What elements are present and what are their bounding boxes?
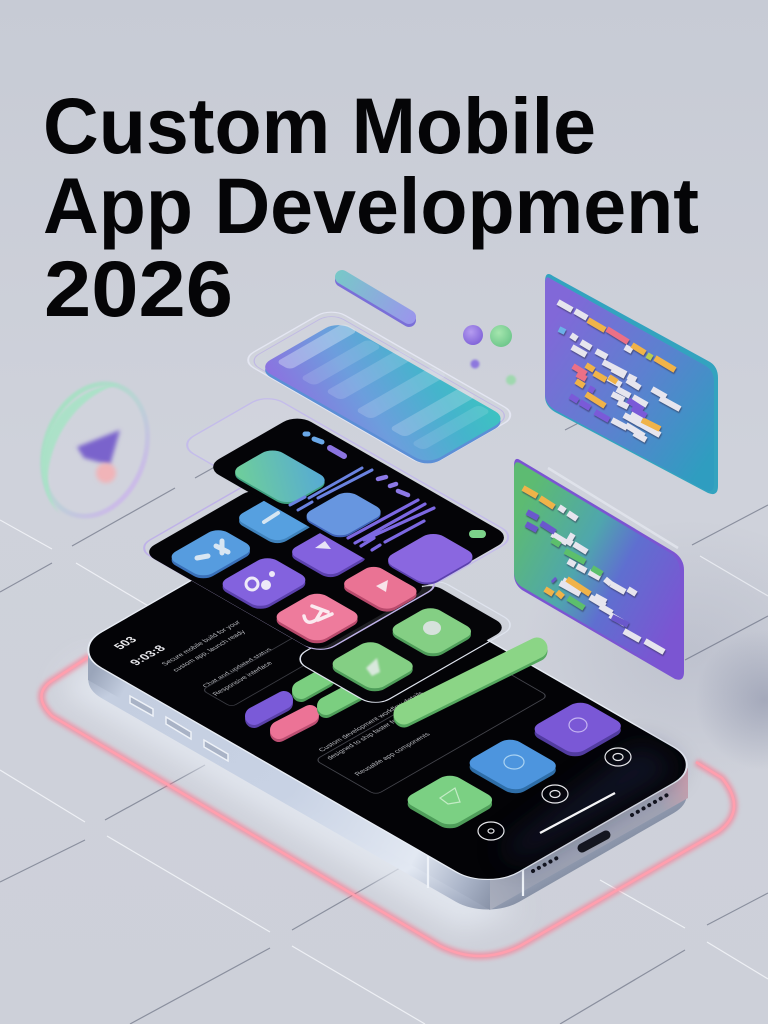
tray glass frame <box>292 577 518 707</box>
blue tile <box>166 527 256 582</box>
code tokens 1 <box>558 302 680 440</box>
dashboard lines purple <box>348 500 434 550</box>
glass inner edge <box>247 312 511 464</box>
gradient panel <box>258 321 508 464</box>
dashboard dots <box>305 434 322 442</box>
title line 3: 2026 <box>44 244 233 333</box>
pink tile rear <box>339 564 422 614</box>
card outline top <box>202 625 345 707</box>
glass frame <box>240 308 518 468</box>
green long bar <box>404 648 537 717</box>
panel rows <box>276 323 491 450</box>
purple cone <box>77 430 120 465</box>
tray plate <box>294 582 509 706</box>
black plate <box>142 487 429 652</box>
phone <box>70 525 705 920</box>
screen text card top <box>161 620 275 697</box>
floating spheres <box>463 325 516 385</box>
charging port <box>582 835 606 848</box>
lower screen text: Reusable app components <box>354 732 433 777</box>
action button blue <box>464 736 561 796</box>
screen sheen <box>500 745 680 860</box>
layer 3 app icon plate <box>136 478 442 654</box>
status pill <box>473 530 482 538</box>
layer 4 small glass tray <box>292 577 518 707</box>
title line 1: Custom Mobile <box>43 81 596 170</box>
pink tile front <box>271 590 363 646</box>
nav circles <box>478 748 631 840</box>
action button purple <box>529 700 626 760</box>
pill buttons <box>254 676 356 733</box>
code panel 2 <box>514 459 684 680</box>
home indicator <box>540 793 615 833</box>
dashboard lines blue <box>290 468 372 510</box>
blue tile top <box>234 496 317 546</box>
code panel 2 back edge <box>548 468 678 548</box>
neon outline glow <box>41 656 734 956</box>
screen text card top: Secure mobile build for your <box>161 620 243 667</box>
card outline bottom <box>315 661 548 795</box>
screen text card top: Chat and updated status <box>202 647 274 689</box>
speaker holes <box>533 795 667 871</box>
title line 2: App Development <box>43 161 699 250</box>
code tokens 2 <box>523 488 664 652</box>
floor reflection under phone <box>60 660 520 930</box>
status text: 503 <box>110 634 140 651</box>
phone screen <box>70 525 705 890</box>
lower screen text <box>318 691 433 777</box>
title <box>43 81 699 333</box>
panel edge <box>258 324 508 468</box>
phone body <box>70 555 705 920</box>
green tile right <box>387 605 477 660</box>
action button green <box>402 772 498 832</box>
ring <box>25 369 165 531</box>
ring thick edge <box>42 384 120 515</box>
clock text: 9:03:8 <box>126 643 169 667</box>
screen text card top: custom app, launch ready <box>172 629 248 673</box>
purple tile <box>217 555 311 612</box>
layer 1 gradient card <box>240 308 518 468</box>
lower screen text: Custom development workflow details <box>318 691 426 753</box>
screen text card top: Responsive interface <box>212 661 275 697</box>
black plate <box>205 414 512 590</box>
floor grid lines <box>0 416 768 1024</box>
purple tile rear <box>287 529 371 580</box>
floating pill <box>342 277 409 320</box>
dashboard purple tile <box>382 530 479 588</box>
dashboard blue tile <box>301 490 386 540</box>
code panel 1 <box>545 274 718 494</box>
floating ring icon <box>25 369 165 531</box>
lower screen text: designed to ship faster for teams <box>326 707 420 761</box>
layer 2 dashboard plate <box>178 394 517 590</box>
right side shadow <box>520 520 768 780</box>
phone side buttons <box>130 696 228 761</box>
plate glass frame <box>178 394 517 588</box>
dashboard gradient tile <box>229 447 331 508</box>
pink ball <box>96 463 116 483</box>
green tile left <box>327 639 418 694</box>
plate glass frame <box>136 478 442 654</box>
antenna band <box>428 852 523 896</box>
